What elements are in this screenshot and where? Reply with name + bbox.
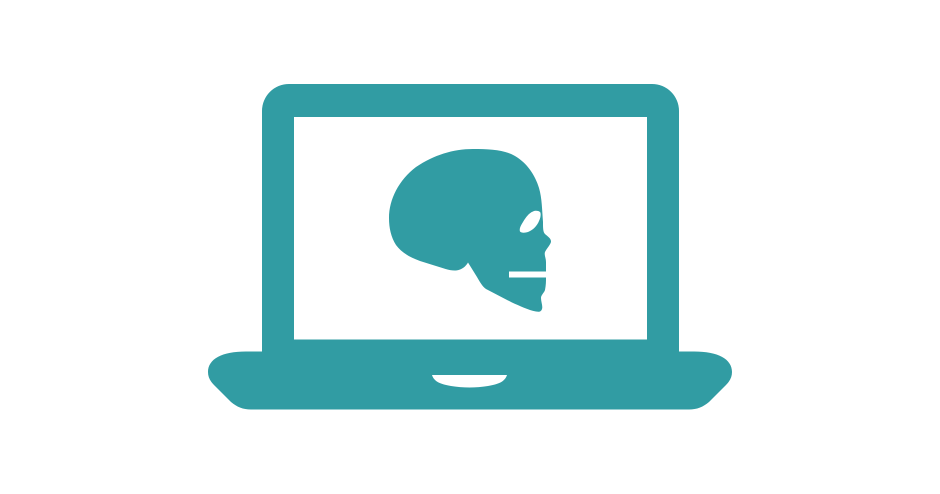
laptop lid and screen xyxy=(262,84,679,353)
skull xyxy=(389,149,551,312)
icon: laptop with skull xyxy=(208,84,732,410)
laptop base with notch xyxy=(208,345,732,410)
